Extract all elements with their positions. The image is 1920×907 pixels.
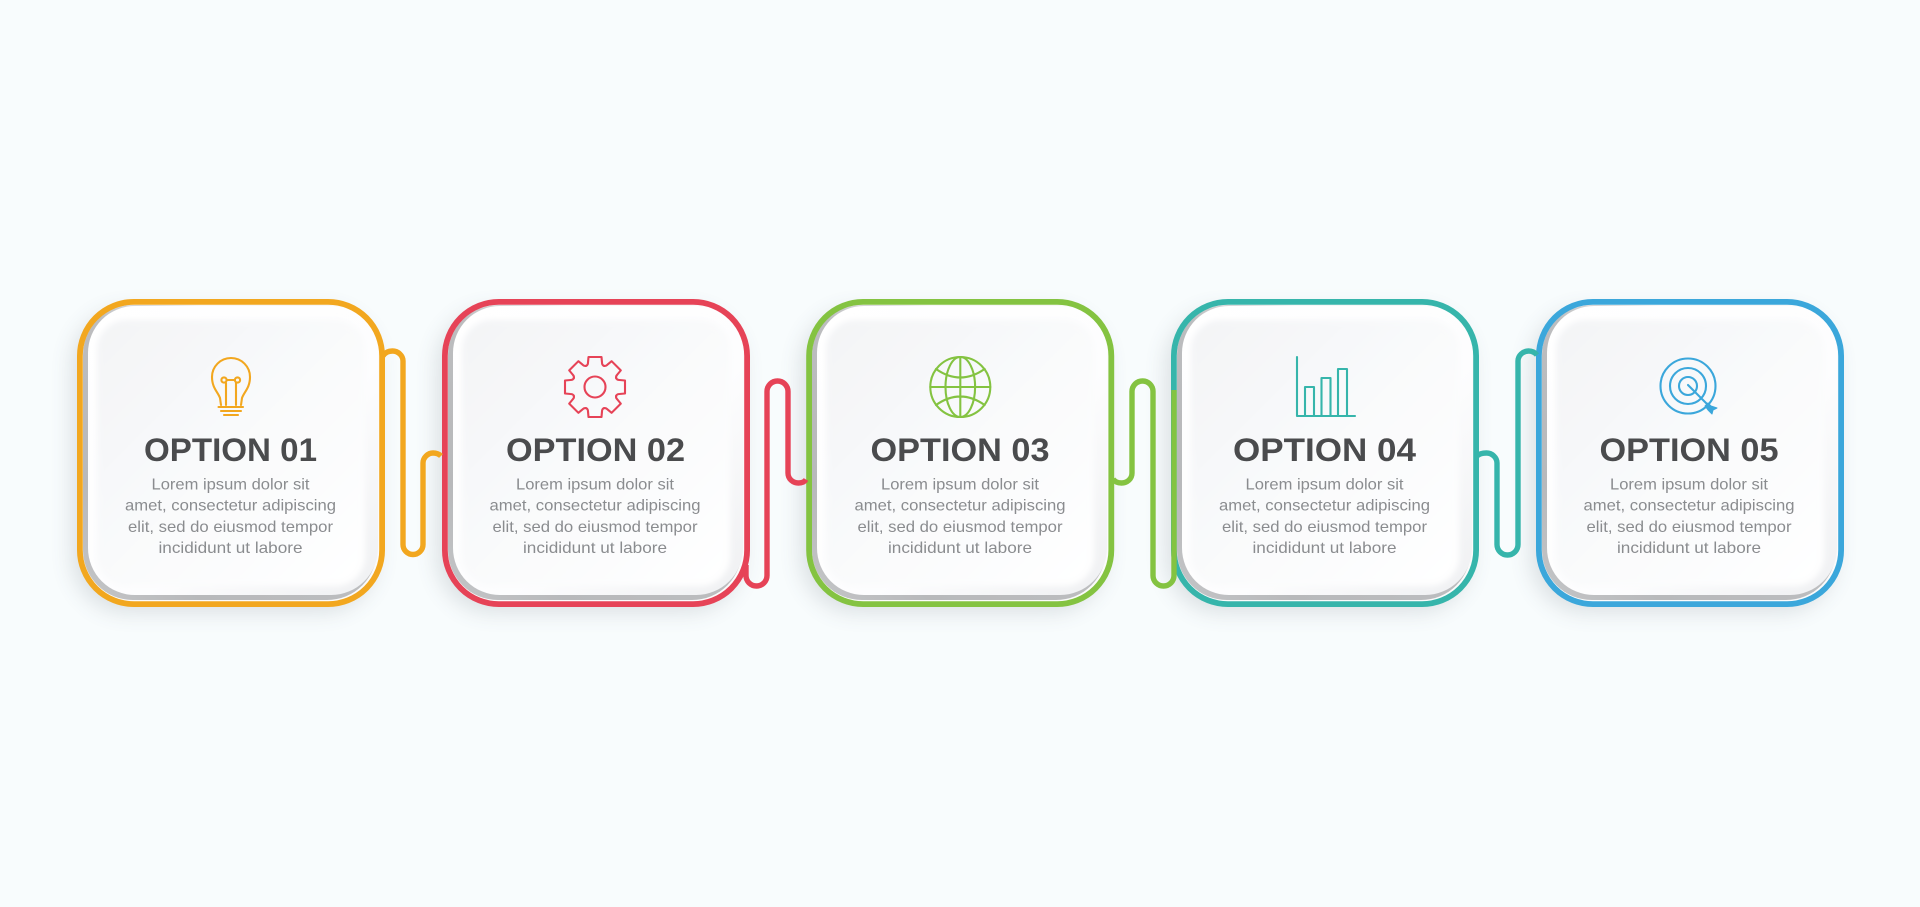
text block: option 04 <box>1219 476 1430 557</box>
heading: option 04: OPTION 04 <box>1233 432 1416 468</box>
text block: option 01: amet, consectetur adipiscing <box>125 498 336 515</box>
text block: option 05: Lorem ipsum dolor sit <box>1610 476 1769 494</box>
icon: gear <box>565 357 625 417</box>
heading: option 01: OPTION 01 <box>144 432 317 468</box>
heading: option 05: OPTION 05 <box>1600 432 1778 468</box>
panel: option 02 <box>437 302 747 612</box>
text block: option 05 <box>1584 476 1794 557</box>
text block: option 02 <box>490 476 700 557</box>
heading: option 02: OPTION 02 <box>506 432 685 468</box>
text block: option 04: incididunt ut labore <box>1252 540 1397 557</box>
text block: option 02: elit, sed do eiusmod tempor <box>492 519 698 536</box>
connector: teal line from option 04 to option 05 <box>1477 351 1537 555</box>
text block: option 01: elit, sed do eiusmod tempor <box>128 519 334 536</box>
text block: option 02: amet, consectetur adipiscing <box>490 498 700 515</box>
text block: option 01 <box>125 476 336 557</box>
panel: option 01 <box>72 302 382 612</box>
panel: option 04 <box>1166 302 1476 612</box>
text block: option 04: elit, sed do eiusmod tempor <box>1222 519 1428 536</box>
text block: option 05: incididunt ut labore <box>1617 540 1761 557</box>
text block: option 03: Lorem ipsum dolor sit <box>881 476 1040 494</box>
panel: option 05 <box>1531 302 1841 612</box>
text block: option 05: elit, sed do eiusmod tempor <box>1586 519 1792 536</box>
panel: option 03 <box>801 302 1111 612</box>
text block: option 04: amet, consectetur adipiscing <box>1219 498 1430 515</box>
text block: option 03 <box>854 476 1066 557</box>
icon: globe <box>930 357 990 417</box>
connector: green line from option 03 to option 04 <box>1113 381 1174 586</box>
connector: red line from option 02 to option 03 <box>746 381 806 586</box>
text block: option 01: Lorem ipsum dolor sit <box>152 476 310 494</box>
text block: option 04: Lorem ipsum dolor sit <box>1246 476 1404 494</box>
text block: option 02: Lorem ipsum dolor sit <box>516 476 675 494</box>
text block: option 01: incididunt ut labore <box>158 540 303 557</box>
text block: option 03: elit, sed do eiusmod tempor <box>858 519 1063 536</box>
heading: option 03: OPTION 03 <box>870 432 1050 468</box>
text block: option 05: amet, consectetur adipiscing <box>1584 498 1794 515</box>
text block: option 03: incididunt ut labore <box>888 540 1032 557</box>
text block: option 03: amet, consectetur adipiscing <box>854 498 1066 515</box>
text block: option 02: incididunt ut labore <box>523 540 667 557</box>
icon: target with arrow <box>1660 358 1717 414</box>
icon: bar chart <box>1297 357 1355 416</box>
connector: orange line from option 01 to option 02 <box>383 351 441 554</box>
icon: light bulb <box>212 358 250 415</box>
